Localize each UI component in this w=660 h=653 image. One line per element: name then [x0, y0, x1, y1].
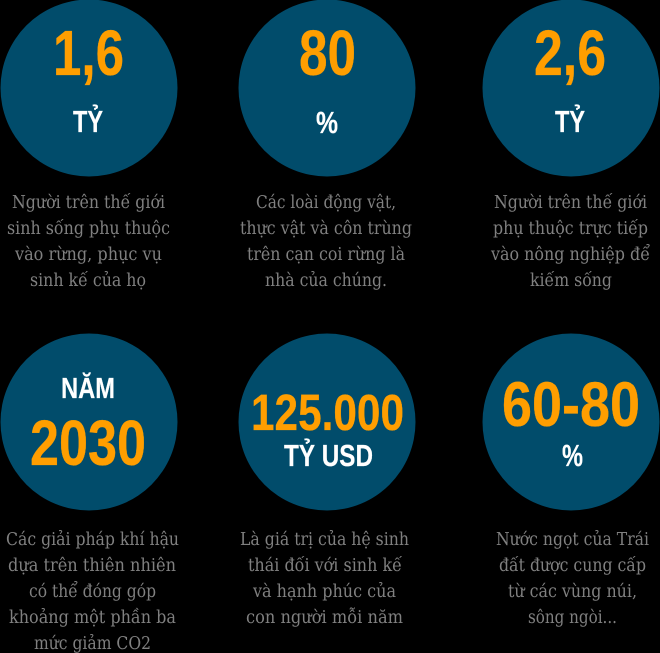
circle	[0, 0, 178, 176]
number: 2,6: 2,6	[534, 17, 606, 89]
panel: 60-80 %	[482, 334, 660, 628]
description	[240, 530, 409, 628]
description: con người mỗi năm	[246, 608, 403, 628]
description: Các giải pháp khí hậu	[6, 530, 179, 550]
number: 125.000: 125.000	[251, 384, 404, 441]
description: từ các vùng núi,	[508, 582, 637, 602]
unit: percent: %	[316, 105, 338, 140]
description: Là giá trị của hệ sinh	[240, 530, 409, 550]
description: sinh sống phụ thuộc	[7, 219, 170, 239]
circle	[0, 334, 178, 510]
description: dựa trên thiên nhiên	[8, 556, 176, 576]
unit: tỷ usd: TỶ USD	[284, 438, 373, 473]
circle	[238, 0, 416, 176]
description: phụ thuộc trực tiếp	[493, 219, 648, 239]
panel: 1,6 tỷ	[0, 0, 178, 291]
panel: năm 2030	[0, 334, 179, 653]
number: 60-80: 60-80	[502, 370, 640, 440]
description: vào rừng, phục vụ	[14, 245, 162, 265]
description: trên cạn coi rừng là	[247, 245, 405, 265]
circle	[482, 334, 660, 510]
description	[240, 193, 412, 291]
label: năm: NĂM	[61, 372, 115, 405]
description	[490, 193, 650, 291]
description: khoảng một phần ba	[9, 608, 176, 628]
number: 2030: 2030	[30, 407, 146, 479]
description: thực vật và côn trùng	[240, 219, 412, 239]
description: đất được cung cấp	[499, 556, 646, 576]
description: Người trên thế giới	[494, 193, 647, 213]
panel: 2,6 tỷ	[482, 0, 660, 291]
number: 80: 80	[299, 17, 356, 89]
description: có thể đóng góp	[29, 582, 156, 602]
description: và hạnh phúc của	[252, 582, 396, 602]
unit: percent: %	[562, 438, 583, 473]
description: nhà của chúng.	[265, 271, 387, 291]
description: sông ngòi...	[528, 608, 617, 628]
description: sinh kế của họ	[30, 271, 146, 291]
description	[496, 530, 649, 628]
description	[7, 193, 170, 291]
description	[6, 530, 179, 653]
circle	[482, 0, 660, 176]
unit: tỷ: TỶ	[555, 104, 585, 139]
description: kiếm sống	[530, 271, 612, 291]
description: thái đối với sinh kế	[248, 556, 402, 576]
circle	[238, 334, 416, 510]
description: Người trên thế giới	[12, 193, 165, 213]
description: Các loài động vật,	[256, 193, 396, 213]
panel: 80 %	[238, 0, 416, 291]
panel: 125.000 tỷ USD	[238, 334, 416, 628]
unit: tỷ: TỶ	[73, 104, 103, 139]
number: 1,6: 1,6	[53, 17, 124, 89]
